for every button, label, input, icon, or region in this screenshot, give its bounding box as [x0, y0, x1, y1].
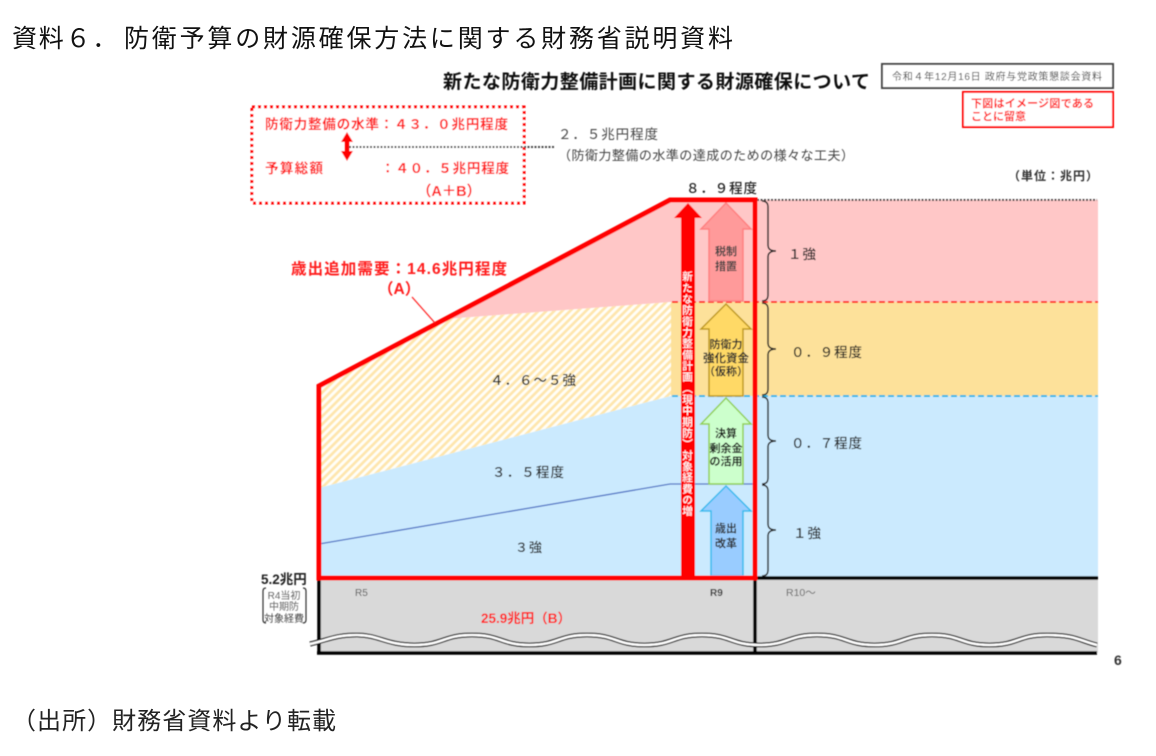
- brace: reform: [762, 485, 776, 576]
- arrow: surplus use: 剰余金: [710, 441, 742, 455]
- brace: fund: [762, 303, 776, 395]
- band: yellow: [671, 302, 1098, 396]
- arrow: tax measures: [701, 203, 751, 301]
- slide content: [252, 64, 1122, 668]
- additional demand label: 歳出追加需要：14.6兆円程度: [291, 259, 507, 278]
- arrow: surplus use: の活用: [710, 454, 742, 468]
- dotted leader line: [349, 146, 554, 148]
- page heading: 防衛予算の財源確保方法に関する財務省説明資料: [124, 25, 733, 53]
- value: 0.9: ０．９程度: [791, 345, 862, 360]
- gap annotation: ２．５兆円程度: [558, 127, 658, 142]
- cyan dashed boundary: [672, 395, 1098, 397]
- page number: 6: [1114, 652, 1122, 668]
- value: 1 strong upper: １強: [788, 247, 816, 262]
- band: hatched: [319, 302, 671, 488]
- brace: tax: [762, 201, 776, 301]
- base amount note: [263, 588, 306, 625]
- dotted summary box: 防衛力整備の水準：４３．０兆円程度: [265, 116, 508, 132]
- value: 1 strong lower: １強: [793, 526, 822, 541]
- axis label R5: R5: [355, 588, 368, 599]
- gap annotation: （防衛力整備の水準の達成のための様々な工夫）: [558, 148, 854, 163]
- arrow: defense fund: （仮称）: [704, 364, 748, 378]
- top dotted line: [757, 199, 1097, 201]
- arrow: defense fund: 防衛力: [710, 337, 742, 351]
- date source box: 令和４年12月16日 政府与党政策懇談会資料: [892, 70, 1102, 83]
- axis label R10: R10～: [786, 587, 816, 599]
- difference double arrow: [341, 132, 353, 161]
- value: hatched area: ４．６～５強: [490, 373, 576, 388]
- date source box: [882, 64, 1113, 88]
- source note: （出所）財務省資料より転載: [12, 708, 336, 735]
- arrow: tax measures: 措置: [715, 259, 737, 273]
- arrow: surplus use: [701, 398, 751, 484]
- additional demand label: （A）: [378, 281, 420, 298]
- arrow: defense fund: [701, 304, 751, 396]
- base amount label: 5.2兆円: [261, 572, 307, 587]
- axis lines: [317, 578, 1098, 653]
- value: 0.7: ０．７程度: [791, 436, 862, 451]
- blue trend line: [319, 484, 755, 544]
- arrow: expenditure reform: 改革: [715, 536, 737, 550]
- vertical arrow label: 新たな防衛力整備計画（現中期防）対象経費の増: [681, 270, 693, 517]
- big red arrow: [674, 203, 702, 578]
- additional demand label: [291, 259, 507, 298]
- axis label R9: R9: [710, 588, 723, 599]
- band: blue: [319, 396, 1098, 578]
- dotted summary box: ：４０．５兆円程度: [381, 161, 510, 176]
- band: pink right: [671, 200, 1098, 302]
- grey base band: [319, 578, 1098, 653]
- gap annotation: [558, 127, 854, 163]
- base amount note: 中期防: [269, 600, 299, 613]
- arrow: surplus use: 決算: [715, 426, 737, 440]
- red dashed boundary: [672, 301, 1098, 303]
- arrow: defense fund: 強化資金: [703, 351, 749, 365]
- arrow: expenditure reform: [701, 486, 751, 576]
- dotted summary box: （A＋B）: [417, 183, 481, 200]
- dotted summary box: [252, 107, 524, 203]
- image disclaimer box: ことに留意: [971, 109, 1026, 123]
- dotted summary box: 予算総額: [265, 160, 324, 176]
- unit label: （単位：兆円）: [1008, 168, 1098, 183]
- image disclaimer box: 下図はイメージ図である: [971, 97, 1094, 110]
- page heading: 資料６．: [12, 25, 119, 53]
- value: 3 strong: ３強: [515, 540, 542, 555]
- label leader: [412, 297, 435, 323]
- image disclaimer box: [963, 92, 1113, 127]
- value: 3.5: ３．５程度: [492, 465, 564, 480]
- arrow: tax measures: 税制: [715, 244, 737, 258]
- base amount note: R4当初: [268, 589, 300, 602]
- arrow: expenditure reform: 歳出: [715, 521, 737, 535]
- brace: surplus: [762, 397, 776, 484]
- wave break mark: [310, 635, 1097, 645]
- band: pink wedge: [319, 200, 672, 386]
- total label: ８．９程度: [686, 181, 758, 196]
- base budget label: 25.9兆円（B）: [481, 611, 571, 626]
- base amount note: 対象経費: [264, 612, 304, 625]
- red outline: [319, 200, 755, 578]
- slide title: 新たな防衛力整備計画に関する財源確保について: [443, 70, 870, 93]
